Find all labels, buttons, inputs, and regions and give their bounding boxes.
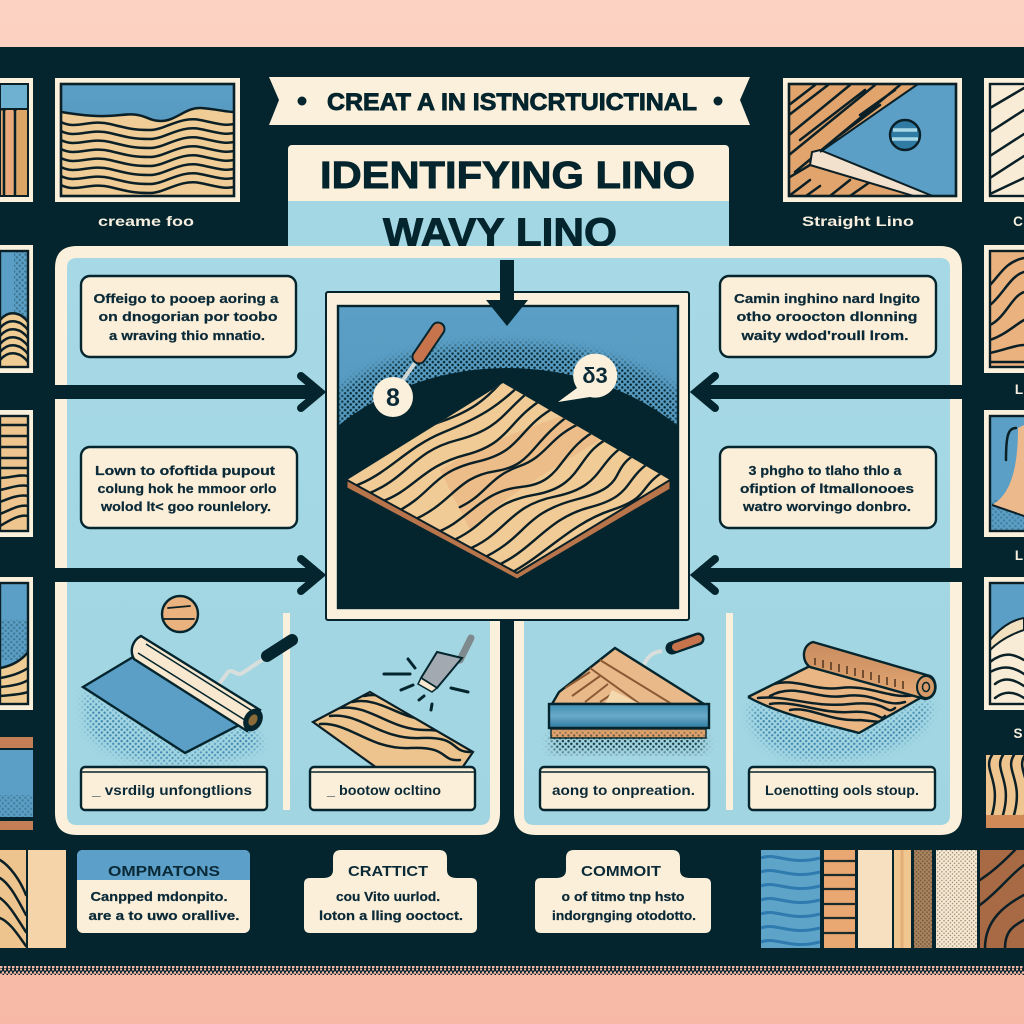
caption box: step four: Loenotting ools stoup. bbox=[765, 783, 919, 798]
card: common tab card: o of titmo tnp hsto bbox=[562, 889, 685, 904]
caption box: step four bbox=[749, 767, 935, 810]
panel: top-right partial thumbnail bbox=[984, 78, 1024, 202]
card: omissions header card: OMPMATONS bbox=[108, 863, 220, 880]
card: practice tab card bbox=[304, 850, 477, 933]
board surface bbox=[339, 375, 677, 577]
panel: right column thumbnail 3 bbox=[984, 410, 1024, 537]
text box: top left: a wraving thio mnatio. bbox=[109, 328, 265, 343]
text box: middle right: watro worvingo donbro. bbox=[742, 499, 911, 514]
board edge bbox=[347, 480, 670, 579]
card: common tab card: indorgnging otodotto. bbox=[552, 908, 696, 923]
icon: tool handle bbox=[403, 329, 438, 380]
panel: right column thumbnail 2 bbox=[984, 245, 1024, 373]
card: practice tab card: loton a lling ooctoct. bbox=[319, 908, 463, 923]
illustration: roller and blue sheet bbox=[60, 636, 292, 770]
caption box: step three bbox=[540, 767, 709, 810]
text box: middle left: colung hok he mmoor orlo bbox=[98, 481, 277, 496]
icon: round wood token bbox=[162, 596, 198, 632]
panel: wavy thumbnail bbox=[55, 78, 240, 202]
label: partial right L: L bbox=[1015, 382, 1023, 397]
arrows: left pair bbox=[55, 376, 320, 591]
text box: middle right: 3 phgho to tlaho thlo a bbox=[748, 463, 902, 478]
text box: middle right: ofiption of ltmallonooes bbox=[740, 481, 914, 496]
swatches: bottom-right material strip bbox=[761, 850, 1024, 948]
central figure: wavy lino board bbox=[326, 292, 689, 620]
callout: speech bubble: δ3 bbox=[582, 363, 608, 388]
label: partial right C: C bbox=[1013, 214, 1023, 229]
caption box: step one: _ vsrdilg unfongtlions bbox=[91, 783, 252, 798]
panel: straight lino thumbnail bbox=[783, 78, 962, 202]
swatch: right column wave block bbox=[986, 755, 1024, 828]
card: common tab card bbox=[535, 850, 711, 933]
callout: speech bubble bbox=[558, 354, 617, 402]
title ribbon bbox=[269, 77, 750, 125]
swatch: left column blue strip bbox=[0, 737, 33, 830]
heading block: WAVY LINO bbox=[383, 211, 617, 255]
caption box: step two bbox=[310, 767, 475, 810]
panel: left column thumbnail 4 bbox=[0, 577, 33, 710]
illustration: rolled wavy lino bbox=[744, 640, 937, 764]
card: practice tab card: cou Vito uurlod. bbox=[336, 889, 440, 904]
label: creame foo: creame foo bbox=[98, 214, 194, 229]
card: common tab card: COMMOIT bbox=[581, 863, 661, 880]
text box: top left bbox=[81, 276, 296, 357]
card: omissions header card: are a to uwo orallive. bbox=[88, 908, 240, 923]
arrow: down into centre bbox=[486, 260, 528, 326]
caption box: step one bbox=[81, 767, 267, 810]
label: straight lino: Straight Lino bbox=[802, 214, 914, 229]
title ribbon: CREAT A IN ISTNCRTUICTINAL bbox=[327, 89, 697, 116]
card: omissions header card bbox=[77, 850, 250, 933]
panel: top-left partial thumbnail bbox=[0, 78, 33, 202]
text box: middle left: wolod lt< goo rounlelory. bbox=[100, 499, 271, 514]
caption box: step two: _ bootow ocltino bbox=[326, 783, 441, 798]
text box: top right bbox=[720, 276, 936, 357]
text box: top left: on dnogorian por toobo bbox=[98, 309, 278, 324]
roller body bbox=[132, 636, 267, 735]
text box: top right: waity wdod'roull lrom. bbox=[740, 328, 908, 343]
panel: left column thumbnail 2 bbox=[0, 245, 33, 373]
panel: left column thumbnail 3 bbox=[0, 410, 33, 537]
label: partial right S: S bbox=[1013, 726, 1023, 741]
text box: middle left bbox=[81, 447, 297, 528]
text box: top right: otho oroocton dlonning bbox=[736, 309, 918, 324]
panel: main left and right frame bbox=[55, 246, 962, 835]
text box: middle right bbox=[720, 447, 936, 528]
swatches: bottom-left wood bbox=[0, 850, 66, 948]
icon: chisel with sparks bbox=[384, 638, 471, 710]
heading block: IDENTIFYING LINO bbox=[320, 155, 695, 197]
callout: number circle bbox=[373, 377, 413, 417]
text box: top left: Offeigo to pooep aoring a bbox=[94, 291, 279, 306]
panel: right column thumbnail 4 bbox=[984, 577, 1024, 710]
callout: number circle: 8 bbox=[386, 384, 400, 412]
card: omissions header card: Canpped mdonpito. bbox=[90, 889, 228, 904]
roller handle bbox=[217, 640, 292, 687]
caption box: step three: aong to onpreation. bbox=[552, 783, 695, 798]
illustration: wood offcut on blue block with trowel bbox=[545, 632, 712, 756]
card: practice tab card: CRATTICT bbox=[348, 863, 428, 880]
trowel bbox=[644, 639, 698, 665]
illustration: wood plank and chisel bbox=[310, 690, 480, 770]
dividers between steps bbox=[283, 613, 733, 810]
label: partial right L second: L bbox=[1015, 548, 1023, 563]
text box: top right: Camin inghino nard lngito bbox=[734, 291, 920, 306]
text box: middle left: Lown to ofoftida pupout bbox=[95, 463, 276, 478]
heading block bbox=[288, 145, 729, 255]
arrows: right pair bbox=[696, 376, 962, 591]
